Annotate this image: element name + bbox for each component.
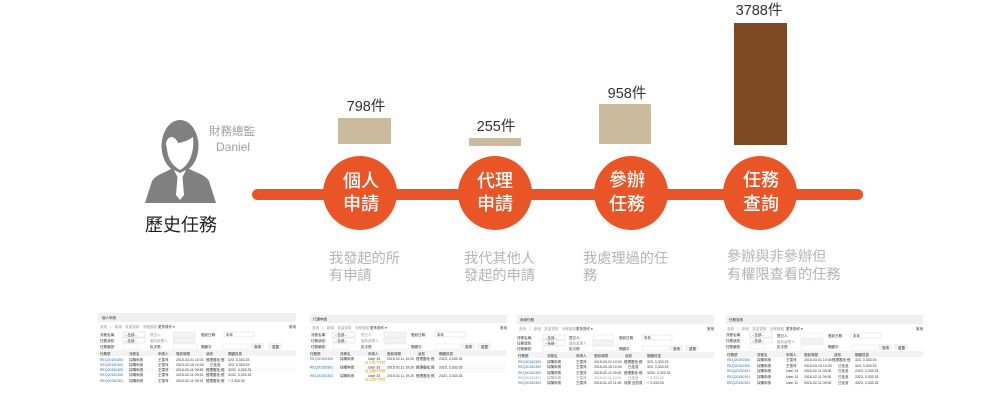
screenshot: personal requests table: 2015-02-11 09:32 [176,379,203,383]
column: participated tasks [583,85,668,284]
screenshot: participated tasks table: 流程名稱: [517,335,532,340]
screenshot: personal requests table: 王雪萍 [158,357,169,362]
bar [599,104,651,144]
screenshot: task lookup table: 任務狀態: [726,338,741,343]
screenshot: participated tasks table: 2015-02-11 09:30 [594,371,621,375]
screenshot: participated tasks table: 採購申請 [547,370,561,375]
screenshot: task lookup table: User 11 [786,381,798,385]
screenshot: participated tasks table: 任務狀態: [517,340,532,346]
node label: 申請 [343,194,379,214]
screenshot: participated tasks table: 經理審批:經 [624,370,643,375]
screenshot: proxy requests table: 本年 [437,332,444,337]
screenshot: participated tasks table: 323, 3,333.33 [647,365,668,369]
screenshot: participated tasks table: 提交人: [569,335,580,340]
node label: 任務 [743,170,779,190]
screenshot: participated tasks table: 採購申請 [547,364,561,369]
screenshot: participated tasks table: 王雪萍 [576,364,587,369]
screenshot: participated tasks table: 當前處理人: [569,340,587,346]
screenshot: participated tasks table: 參辦任務 [520,317,534,322]
screenshot: participated tasks table: 採購申請 [547,380,561,385]
screenshot: proxy requests table: 關鍵訊息 [439,351,453,356]
screenshot: task lookup table: 王雪萍 [786,357,797,362]
screenshot: proxy requests table: 查詢 | 新增 批量簽核 流程追蹤 [312,325,369,330]
screenshot: proxy requests table: 採購申請 [340,364,354,370]
screenshot: task lookup table: 批次號: [777,344,788,349]
name label: Daniel [216,140,250,154]
screenshot: personal requests table: 任務狀態: [100,338,115,343]
screenshot: proxy requests table: REQ20150301 [310,366,333,370]
screenshot: task lookup table: REQ20150301 [727,369,750,373]
screenshot: proxy requests table: 任務編號: [311,344,326,349]
screenshot: participated tasks table: 關鍵字: [619,346,630,351]
screenshot: personal requests table: 經理審批:經 [206,357,225,362]
screenshot: participated tasks table: 王雪萍 [576,359,587,364]
node label: 申請 [477,194,513,214]
screenshot: task lookup table: 流程名稱: [726,332,741,337]
screenshot: proxy requests table: REQ20150300 [310,357,333,361]
screenshot: participated tasks table: 批次號: [569,346,580,351]
screenshot: task lookup table: --全部-- [752,332,764,337]
screenshot: personal requests table: 323, 3,333.33 [228,358,249,362]
screenshot: task lookup table: 查詢 [882,345,889,350]
node label: 任務 [609,194,645,214]
screenshot: participated tasks table: 查詢 [673,346,680,351]
screenshot: personal requests table: 採購申請 [129,367,143,372]
description: 我發起的所 [329,251,400,267]
screenshot: proxy requests table: 由主管代申請 [365,368,386,373]
screenshot: proxy requests table: 經理審批:經 [416,364,435,370]
screenshot: proxy requests table: 查詢 [465,344,472,349]
screenshot: participated tasks table: 3232, 3,323.33 [647,371,670,375]
screenshot: task lookup table: 2015-02-11 09:30 [804,369,831,373]
screenshot: task lookup table: 經理審批:經 [832,357,851,362]
screenshot: personal requests table: 本年 [226,332,233,337]
screenshot: proxy requests table: 2015.02.11 19:20 [387,374,414,378]
screenshot: personal requests table: 查詢 [254,344,261,349]
screenshot: personal requests table: 提交人: [150,332,161,337]
screenshot: proxy requests table: --全部-- [335,338,347,343]
screenshot: task lookup table: REQ20150300 [727,358,750,362]
screenshot: task lookup table: 發起日期: [828,333,843,338]
screenshot: task lookup table: 重置 [898,345,905,350]
screenshot: participated tasks table: 2015-02-11 10:31 [594,376,621,380]
screenshot: task lookup table: 採購申請 [757,363,771,368]
description: 有權限查看的任務 [727,267,841,283]
screenshot: proxy requests table: 狀態 [418,351,425,356]
screenshot: task lookup table: 關鍵訊息 [855,352,869,357]
column: task lookup [723,2,841,283]
screenshot: participated tasks table: 任務號 [518,353,529,358]
screenshot: proxy requests table: 流程名稱: [311,332,326,337]
screenshot: participated tasks table: 待核 品質員 [624,380,643,385]
screenshot: task lookup table: 323, 3,333.33 [855,364,876,368]
screenshot: proxy requests table: 2015.02.11 19:20 [387,366,414,370]
screenshot: task lookup table: REQ20150301 [727,375,750,379]
screenshot: participated tasks table: REQ20150300 [518,365,541,369]
screenshot: proxy requests table: 任務狀態: [311,338,326,343]
screenshot: personal requests table: 任務編號: [100,344,115,349]
description: 務 [583,268,597,284]
screenshot: participated tasks table: 323, 3,333.33 [647,360,668,364]
screenshot: personal requests table: 2015-03-01 10:30 [176,358,204,362]
screenshot: participated tasks table: 發起日期: [619,335,634,340]
screenshot: task lookup table: 提交人: [777,333,788,338]
screenshot: participated tasks table: --全部-- [545,340,557,346]
screenshot: task lookup table: 2323, 3,333.33 [855,375,878,379]
screenshot: personal requests table: 發起時間 [176,351,190,356]
screenshot: task lookup table: 更多操作 ▾ [786,326,803,331]
screenshot: personal requests table: 已批准 [210,362,221,367]
screenshot: participated tasks table: 狀態 [625,353,632,358]
screenshot: personal requests table: 2015-02-11 09:31 [176,373,203,377]
screenshot: task lookup table: 2015-02-11 09:30 [804,381,831,385]
screenshot: task lookup table: User 13 [786,375,798,379]
screenshot: task lookup table: 已批准 [838,374,849,379]
screenshot: participated tasks table: REQ20150300 [518,360,541,364]
screenshot: participated tasks table: 任務編號: [517,346,532,351]
screenshot: task lookup table: 任務號 [727,352,738,357]
screenshot: task lookup table: 採購申請 [757,368,771,373]
screenshot: personal requests table: 流程名 [129,351,140,356]
screenshot: personal requests table: 王雪萍 [158,378,169,383]
screenshot: proxy requests table: REQ20150302 [310,374,333,378]
node label: 查詢 [743,194,779,214]
screenshot: proxy requests table: 批次號: [361,344,372,349]
description: 我代其他人 [464,251,535,267]
screenshot: personal requests table: 採購申請 [129,357,143,362]
screenshot: personal requests table: 王雪萍 [158,362,169,367]
screenshot: proxy requests table: 當前處理人: [361,338,379,343]
screenshot: personal requests table: 批次號: [150,344,161,349]
bar [734,23,787,145]
screenshot: participated tasks table: 申請人 [576,353,587,358]
screenshot: participated tasks table: REQ20150301 [518,376,541,380]
screenshot: participated tasks table: REQ20150300 [518,371,541,375]
node [723,156,797,230]
node label: 代理 [477,171,513,191]
screenshot: proxy requests table: 發起時間 [387,351,401,356]
screenshot: personal requests table: REQ20150301 [100,379,123,383]
screenshot: personal requests table: 當前處理人: [150,338,168,343]
screenshot: personal requests table: 2015-02-15 10:30 [176,363,204,367]
screenshot: participated tasks table: 採購申請 [547,359,561,364]
screenshot: task lookup table: 任務編號: [726,344,741,349]
column: proxy requests [458,118,535,284]
node [458,156,532,230]
screenshot: participated tasks table: 2015-03-01 10:30 [594,360,622,364]
screenshot: proxy requests table: 由主管代申請 [365,360,386,364]
role label: 財務總監 [209,124,255,138]
screenshot: proxy requests table: 代理申請 [313,316,327,322]
screenshot: task lookup table: 採購申請 [757,380,771,385]
screenshot: task lookup table: 2015-03-15 10:30 [804,364,832,368]
screenshot: task lookup table: 已批准 [838,363,849,368]
node [323,156,397,230]
screenshot: task lookup table: 本年 [853,333,860,338]
screenshot: personal requests table: 重置 [272,344,279,349]
screenshot: task lookup table: 關鍵字: [828,344,839,349]
screenshot: personal requests table: 經理審批:經 [206,372,225,377]
screenshot: task lookup table: 狀態 [834,352,841,357]
description: 我處理過的任 [583,251,668,267]
screenshot: personal requests table: 3232, 3,323.33 [228,368,251,372]
screenshot: personal requests table: 323, 3,333.33 [228,363,249,367]
screenshot: personal requests table: 流程名稱: [100,332,115,337]
screenshot: proxy requests table: 經理審批:經 [416,356,435,361]
screenshot: personal requests table: 採購申請 [129,372,143,377]
screenshot: personal requests table: 採購申請 [129,362,143,367]
screenshot: proxy requests table: 關鍵字: [411,344,422,349]
screenshot: participated tasks table: 王雪萍 [576,380,587,385]
screenshot: personal requests table: 關鍵訊息 [228,351,242,356]
screenshot: proxy requests table: 由主管代申請 [365,376,386,382]
screenshot: personal requests table: 2015-02-11 09:30 [176,368,203,372]
screenshot: participated tasks table: 已批准 [628,364,639,369]
screenshot: participated tasks table: + 3,333.33 [647,381,664,385]
screenshot: personal requests table: 王雪萍 [158,372,169,377]
screenshot: participated tasks table: 重置 [689,346,696,351]
node label: 參辦 [609,169,645,190]
screenshot: personal requests table: 常用 [289,324,296,329]
screenshot: personal requests table: 採購申請 [129,378,143,383]
count: 958件 [608,85,646,102]
screenshot: personal requests table: REQ20150300 [100,363,123,367]
screenshot: proxy requests table: User 33 [368,357,380,361]
screenshot: participated tasks table: 經理審批:經 [624,359,643,364]
bar [469,138,521,146]
bar [338,118,391,144]
screenshot: proxy requests table: 採購申請 [340,356,354,361]
screenshot: personal requests table: 查詢 | 新增 批量簽核 流程追蹤 [100,324,157,329]
column: personal requests [323,98,400,284]
screenshot: proxy requests table [310,315,508,382]
screenshot: personal requests table: 3232, 3,323.33 [228,373,251,377]
screenshot: participated tasks table: --全部-- [545,335,557,340]
screenshot: personal requests table: 申請人 [158,351,169,356]
screenshot: proxy requests table: 流程名 [340,351,351,356]
screenshot: proxy requests table: 提交人: [361,332,372,337]
screenshot: participated tasks table: 王雪萍 [576,375,587,380]
screenshot: personal requests table: 經理審批:經 [206,367,225,372]
screenshot: task lookup table: 2015-02-11 09:30 [804,375,831,379]
screenshot: task lookup table: 4423, 3,333.33 [855,381,878,385]
screenshot: participated tasks table: 本年 [644,335,651,340]
screenshot: task lookup table: 任務查詢 [729,317,743,322]
screenshot: task lookup table: 申請人 [786,352,797,357]
screenshot: proxy requests table: 2323, 3,333.33 [439,374,462,378]
screenshot: proxy requests table: User 33 [368,374,380,378]
description: 發起的申請 [464,268,535,284]
screenshot: participated tasks table: 關鍵訊息 [647,353,661,358]
screenshot: proxy requests table: 常用 [500,325,507,330]
screenshot: task lookup table: 已批准 [838,380,849,385]
count: 798件 [347,98,385,115]
screenshot: task lookup table: REQ20150300 [727,364,750,368]
screenshot: participated tasks table: 查詢 | 新增 批量簽核 流程追蹤 [519,326,576,331]
icon: person silhouette [145,120,216,203]
node label: 個人 [343,171,379,191]
screenshot: task lookup table: 流程名 [757,352,768,357]
screenshot: personal requests table: + 3,333.33 [228,379,245,383]
screenshot: task lookup table: 2015-03-01 10:30 [804,358,832,362]
screenshot: participated tasks table: 常用 [707,326,714,331]
screenshot: participated tasks table: 王雪萍 [576,370,587,375]
description: 有申請 [329,268,372,284]
screenshot: proxy requests table: 申請人 [368,351,379,356]
screenshot: task lookup table: 已批准 [838,368,849,373]
screenshot: task lookup table: 常用 [916,326,923,331]
screenshot: task lookup table: 查詢 | 新增 批量簽核 流程追蹤 [727,326,784,331]
screenshot: task lookup table: 採購申請 [757,374,771,379]
screenshot: personal requests table: 經理審批:經 [206,378,225,383]
persona: finance director [145,120,255,235]
screenshot: task lookup table: 王雪萍 [786,363,797,368]
screenshot: proxy requests table: 採購申請 [340,373,354,378]
count: 255件 [477,118,515,135]
screenshot: participated tasks table [517,315,714,385]
description: 參辦與非參辦但 [727,249,826,265]
screenshot: participated tasks table: 採購申請 [547,375,561,380]
screenshot: proxy requests table: User 33 [368,366,380,370]
screenshot: participated tasks table: REQ20150302 [518,381,541,385]
node [594,156,668,230]
screenshot: participated tasks table: 已拒絕 [628,375,639,380]
screenshot: personal requests table: 發起日期: [201,332,216,337]
screenshot: proxy requests table: 重置 [481,344,488,349]
screenshot: personal requests table: REQ20150300 [100,358,123,362]
screenshot: participated tasks table: 發起時間 [594,353,608,358]
screenshot: proxy requests table: 2323, 3,333.33 [439,357,462,361]
screenshot: task lookup table: 2323, 3,333.33 [855,369,878,373]
screenshot: personal requests table: 王雪萍 [158,367,169,372]
screenshot: proxy requests table: 2323, 3,333.33 [439,366,462,370]
screenshot: proxy requests table: --全部-- [335,332,347,337]
screenshot: participated tasks table: 2015-01-20 11:30 [594,381,621,385]
screenshot: participated tasks table: 更多操作 ▾ [576,326,593,331]
screenshot: participated tasks table: 2015-03-15 10:30 [594,365,622,369]
screenshot: task lookup table: 323, 3,333.33 [855,358,876,362]
screenshot: task lookup table: REQ20150302 [727,381,750,385]
screenshot: personal requests table: 任務號 [100,351,111,356]
screenshot: personal requests table: --全部-- [125,338,137,343]
screenshot: participated tasks table: 流程名 [547,353,558,358]
screenshot: proxy requests table: 任務號 [310,351,321,356]
screenshot: task lookup table: 當前處理人: [777,339,795,344]
screenshot: personal requests table [98,313,296,383]
screenshot: personal requests table: 更多操作 ▾ [158,324,175,329]
screenshot: task lookup table: --全部-- [752,338,764,343]
screenshot: proxy requests table: 更多操作 ▾ [370,325,387,330]
screenshot: proxy requests table: 經理審批:經 [416,373,435,378]
timeline line [252,189,863,200]
screenshot: proxy requests table: 發起日期: [411,332,426,337]
screenshot: personal requests table: REQ20150300 [100,368,123,372]
screenshot: task lookup table [726,315,924,385]
screenshot: task lookup table: 採購申請 [757,357,771,362]
count: 3788件 [736,2,782,19]
heading: 歷史任務 [145,215,217,235]
screenshot: personal requests table: 狀態 [206,351,213,356]
screenshot: personal requests table: REQ20150300 [100,373,123,377]
screenshot: personal requests table: 個人申請 [102,315,116,320]
screenshot: participated tasks table: + 3,333.33 [647,376,664,380]
screenshot: proxy requests table: 2015.02.11 19:20 [387,357,414,361]
screenshot: personal requests table: 關鍵字: [201,344,212,349]
screenshot: task lookup table: 發起時間 [804,352,818,357]
screenshot: task lookup table: User 13 [786,369,798,373]
screenshot: personal requests table: --全部-- [125,332,137,337]
